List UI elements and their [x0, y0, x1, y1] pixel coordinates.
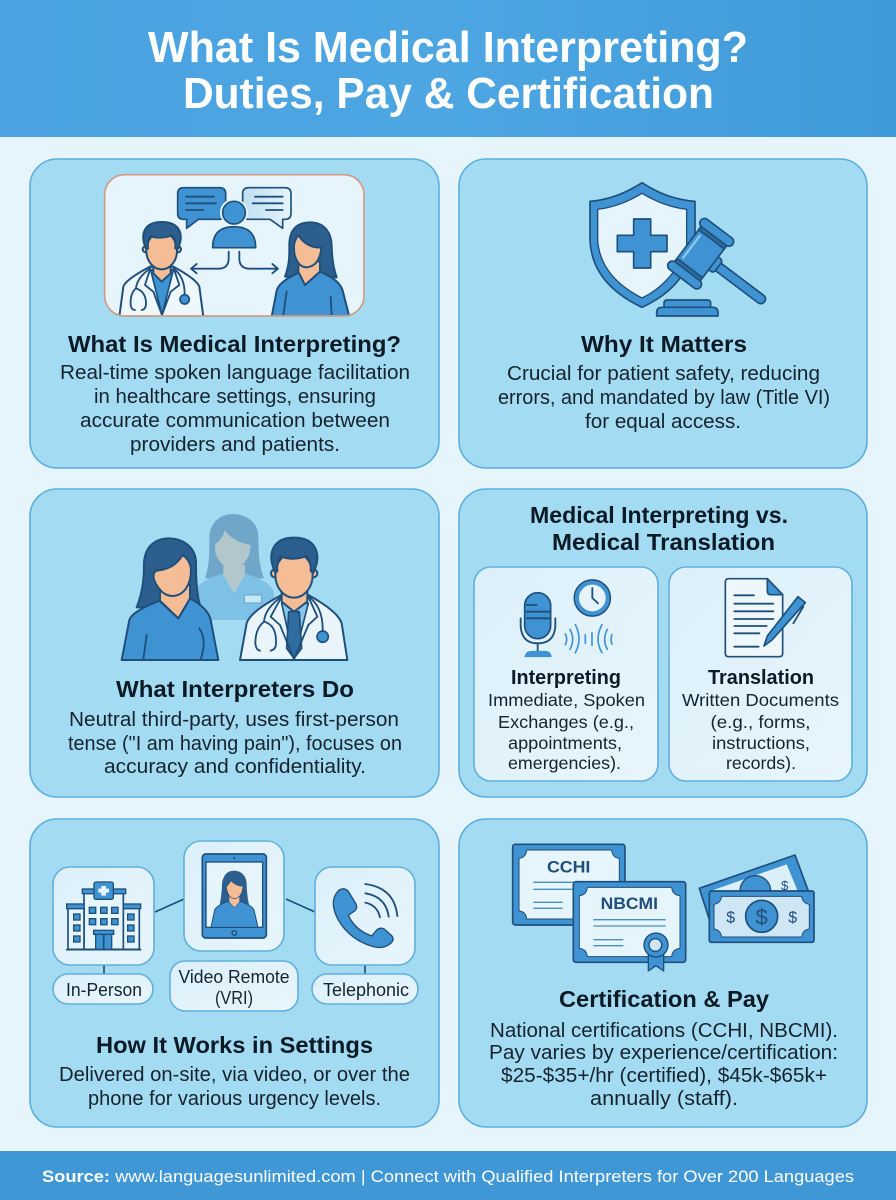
illustration: patient, interpreter and doctor: [122, 514, 347, 660]
arrows: [191, 252, 278, 273]
icon: microphone, clock, sound waves: [521, 580, 612, 657]
label: telephonic: Telephonic: [323, 980, 409, 1000]
label: telephonic: [312, 974, 418, 1004]
title: Duties, Pay & Certification: [183, 69, 714, 118]
card text: [488, 690, 645, 773]
heading: Medical Translation: [552, 529, 775, 555]
panel: why it matters: [459, 159, 867, 468]
body text: [68, 709, 402, 778]
card text: records).: [726, 753, 796, 773]
panel: interpreting vs translation: [459, 489, 867, 797]
icon: hospital: [66, 882, 141, 950]
body text: accurate communication between: [80, 410, 390, 432]
label: in-person: [53, 974, 153, 1004]
body text: Delivered on-site, via video, or over the: [59, 1064, 410, 1086]
icon: shield and gavel: [590, 183, 783, 327]
body text: Pay varies by experience/certification:: [489, 1042, 838, 1064]
label: in-person: In-Person: [66, 980, 142, 1000]
body text: in healthcare settings, ensuring: [94, 386, 376, 408]
panel: certification and pay: [459, 819, 867, 1127]
doctor: [240, 595, 347, 660]
card text: emergencies).: [508, 753, 621, 773]
header banner: [0, 0, 896, 137]
icon: document and pen: [725, 579, 805, 657]
icon: tablet with person: [202, 854, 266, 938]
connectors: [104, 899, 365, 974]
heading: What Interpreters Do: [116, 676, 354, 702]
title: [148, 23, 748, 118]
body text: tense ("I am having pain"), focuses on: [68, 733, 402, 755]
panel: how it works in settings: [30, 819, 439, 1127]
body text: accuracy and confidentiality.: [104, 756, 366, 778]
card text: Exchanges (e.g.,: [498, 712, 634, 732]
faded interpreter: [196, 514, 274, 620]
body text: phone for various urgency levels.: [88, 1088, 381, 1110]
card label: Translation: [708, 667, 814, 689]
body text: for equal access.: [585, 411, 741, 433]
body text: errors, and mandated by law (Title VI): [498, 387, 830, 409]
label: video remote: [170, 961, 298, 1011]
icon: cash: [699, 855, 814, 942]
card: translation: [669, 567, 852, 781]
body text: National certifications (CCHI, NBCMI).: [490, 1020, 838, 1042]
body text: providers and patients.: [130, 434, 340, 456]
body text: [59, 1064, 410, 1110]
body text: [489, 1020, 838, 1110]
certificate: CCHI: CCHI: [547, 857, 590, 876]
body text: Neutral third-party, uses first-person: [69, 709, 399, 731]
card text: Written Documents: [682, 690, 839, 710]
card label: Interpreting: [511, 667, 621, 689]
title: What Is Medical Interpreting?: [148, 23, 748, 72]
setting: in-person: [53, 867, 154, 965]
heading: Medical Interpreting vs.: [530, 502, 788, 528]
setting: telephonic: [315, 867, 415, 965]
heading: What Is Medical Interpreting?: [68, 331, 401, 357]
interpreter figure: [213, 199, 256, 248]
panel: what is medical interpreting: [30, 159, 439, 468]
heading: [530, 502, 788, 555]
illustration: interpreter between doctor and patient: [105, 175, 364, 317]
footer bar: [0, 1151, 896, 1200]
body text: [60, 362, 410, 456]
body text: Crucial for patient safety, reducing: [507, 363, 820, 385]
card text: [682, 690, 839, 773]
icon: phone with signal: [333, 884, 397, 947]
icon: cash: $: [788, 909, 797, 926]
illustration: certificates and cash: [513, 844, 814, 971]
label: video remote: Video Remote: [178, 967, 290, 987]
certificate: CCHI: [513, 844, 625, 925]
card text: (e.g., forms,: [710, 712, 810, 732]
certificate: NBCMI: NBCMI: [601, 895, 658, 913]
heading: Why It Matters: [581, 331, 747, 357]
setting: video remote: [184, 841, 284, 951]
heading: Certification & Pay: [559, 986, 769, 1012]
speech bubbles: [178, 188, 291, 228]
icon: cash: $: [756, 904, 768, 929]
icon: cash: $: [726, 909, 735, 926]
body text: Real-time spoken language facilitation: [60, 362, 410, 384]
body text: [498, 363, 830, 433]
icon: cash: $: [781, 878, 789, 893]
card text: Immediate, Spoken: [488, 690, 645, 710]
card: interpreting: [474, 567, 658, 781]
patient: [137, 538, 201, 607]
body text: annually (staff).: [590, 1088, 738, 1110]
heading: How It Works in Settings: [96, 1032, 373, 1058]
panel: what interpreters do: [30, 489, 439, 797]
certificate: NBCMI: [573, 882, 686, 971]
label: video remote: (VRI): [215, 988, 253, 1008]
card text: appointments,: [508, 733, 622, 753]
body text: $25-$35+/hr (certified), $45k-$65k+: [501, 1065, 827, 1087]
card text: instructions,: [712, 733, 810, 753]
source line: Source: www.languagesunlimited.com | Connect with Qualified Interpreters for Over 200 Languages: [42, 1167, 854, 1186]
